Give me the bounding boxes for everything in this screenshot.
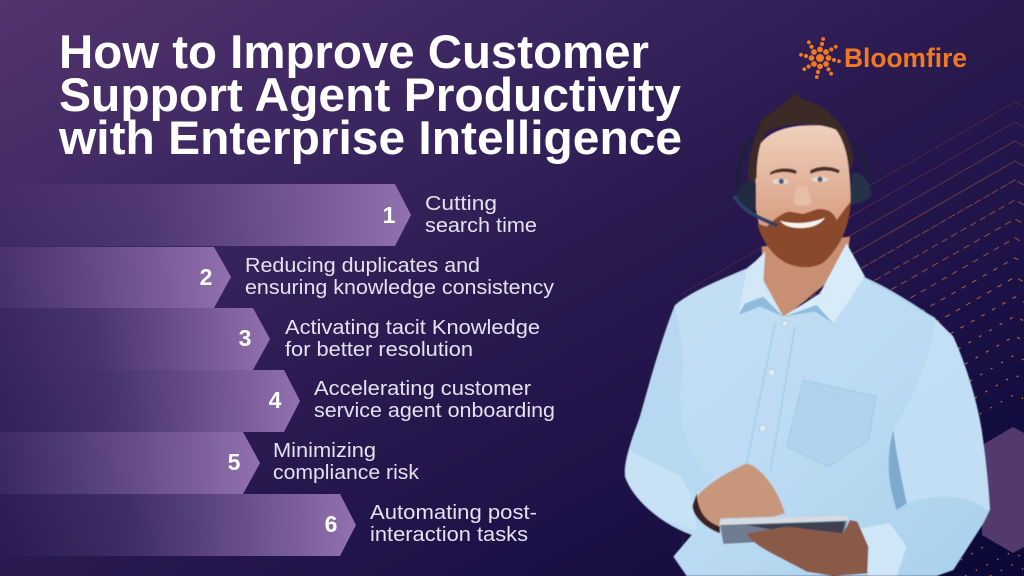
step 2 — [0, 247, 555, 308]
step 1 — [0, 184, 537, 246]
step 4: service agent onboarding — [314, 399, 555, 422]
step 4: 4 — [269, 387, 282, 413]
face — [755, 125, 851, 267]
shirt — [625, 243, 990, 576]
step 4: Accelerating customer — [314, 377, 531, 400]
right cuff — [860, 523, 907, 576]
dots under hexagon — [940, 546, 1024, 576]
chevron line pattern — [683, 102, 1024, 552]
step 6: interaction tasks — [370, 523, 528, 546]
headset band — [738, 138, 868, 193]
step 1: 1 — [383, 202, 396, 228]
step 3 — [0, 308, 540, 370]
shirt shading — [893, 318, 990, 510]
placket and pocket — [747, 277, 935, 473]
step 6: Automating post- — [370, 501, 537, 524]
logo: Bloomfire: Bloomfire — [844, 43, 967, 73]
tablet — [719, 515, 848, 544]
mouth — [780, 218, 825, 228]
step 5: 5 — [228, 449, 241, 475]
step 6: 6 — [325, 511, 337, 537]
title — [58, 25, 682, 164]
photo: support agent — [625, 93, 990, 576]
title: How to Improve Customer — [59, 25, 649, 78]
step 5: Minimizing — [273, 439, 376, 462]
logo: Bloomfire — [799, 37, 967, 79]
step 6 — [0, 494, 537, 556]
step 3: 3 — [239, 325, 251, 351]
hexagon accent — [982, 427, 1024, 553]
icon: sunburst — [799, 37, 841, 79]
step 4 — [0, 370, 555, 432]
step 1: search time — [425, 214, 537, 237]
collar — [738, 243, 865, 323]
step 5 — [0, 432, 420, 494]
step 2: ensuring knowledge consistency — [245, 276, 555, 299]
left hand — [693, 463, 785, 528]
step 3: for better resolution — [285, 338, 473, 361]
right hand — [747, 520, 868, 576]
step 2: Reducing duplicates and — [245, 254, 480, 277]
step 2: 2 — [200, 264, 212, 290]
buttons — [759, 320, 788, 432]
step 1: Cutting — [425, 192, 497, 215]
headset ear cups — [735, 173, 872, 211]
title: Support Agent Productivity — [59, 68, 681, 121]
microphone boom — [735, 197, 776, 225]
neck — [762, 237, 850, 318]
eyes and brows — [770, 167, 840, 206]
hair — [748, 93, 854, 190]
beard — [757, 202, 851, 267]
step 5: compliance risk — [273, 461, 420, 484]
title: with Enterprise Intelligence — [58, 111, 682, 164]
step 3: Activating tacit Knowledge — [285, 316, 540, 339]
